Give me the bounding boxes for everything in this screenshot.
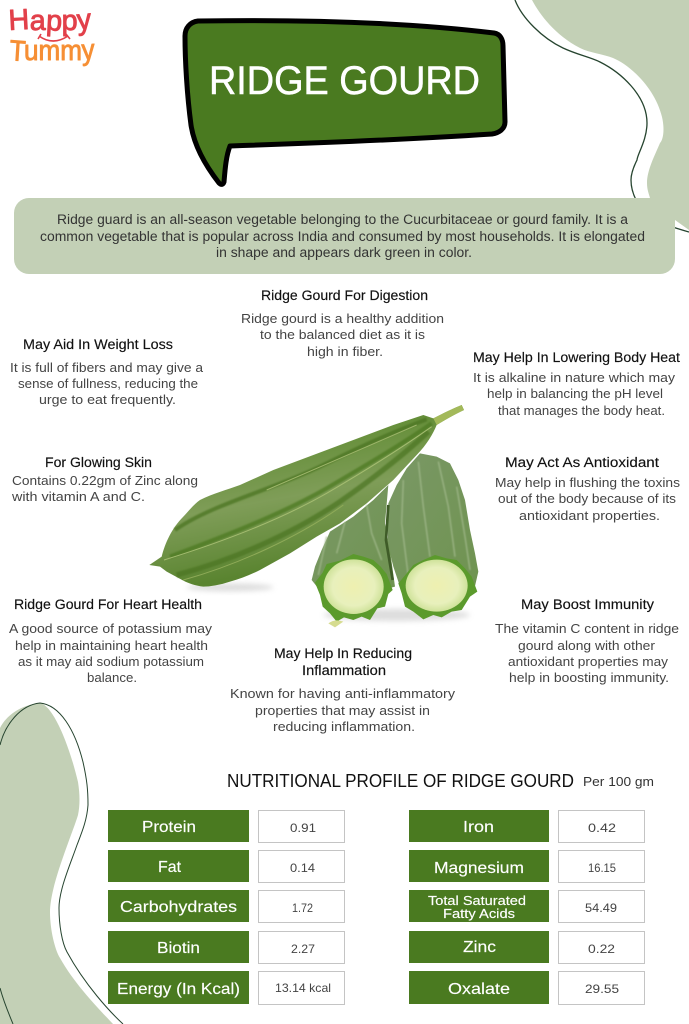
decorative blob: top right — [515, 0, 689, 232]
logo: Happy Tummy: Tummy — [9, 34, 96, 68]
benefit: heart health: balance. — [87, 670, 137, 685]
nutrition table: left column: 1.72 — [292, 901, 313, 915]
nutrition table: right column: Fatty Acids — [443, 906, 516, 921]
nutrition table: right column: 0.22 — [588, 942, 615, 956]
benefit: body heat: help in balancing the pH level — [487, 386, 663, 401]
benefit: digestion: Ridge gourd is a healthy addition — [241, 311, 444, 326]
nutrition table: left column: 0.14 — [290, 861, 315, 875]
cut piece: left — [312, 485, 395, 603]
benefit: inflammation: Inflammation — [302, 663, 386, 678]
benefit: glowing skin: For Glowing Skin — [45, 455, 152, 470]
cut piece: right — [387, 453, 478, 593]
nutrition table: right column: 29.55 — [585, 982, 619, 996]
cut face: right — [398, 555, 477, 619]
nutrition table: right column: 54.49 — [585, 901, 617, 915]
nutrition table: left column: Biotin — [157, 940, 200, 957]
nutrition table: left column: 0.91 — [290, 821, 316, 835]
nutrition heading: Per 100 gm — [583, 774, 654, 789]
nutrition table: left column: Carbohydrates — [120, 899, 237, 916]
benefit: weight loss: May Aid In Weight Loss — [23, 337, 173, 352]
benefit: inflammation: Known for having anti-inflammatory — [230, 686, 456, 701]
benefit: immunity: antioxidant properties may — [508, 654, 669, 669]
decorative blob: bottom left — [0, 703, 123, 1024]
nutrition table: right column: Oxalate — [448, 981, 510, 998]
nutrition table: right column: Total Saturated — [428, 893, 526, 908]
benefit: heart health: Ridge Gourd For Heart Health — [14, 597, 202, 612]
intro text: in shape and appears dark green in color. — [216, 245, 472, 260]
logo: Happy Tummy — [8, 4, 96, 68]
nutrition table: right column — [409, 810, 644, 1004]
title text: RIDGE GOURD — [209, 59, 480, 103]
benefit: antioxidant: antioxidant properties. — [519, 508, 660, 523]
benefit: digestion: high in fiber. — [307, 344, 383, 359]
nutrition table: left column — [108, 810, 344, 1004]
nutrition table: right column: 0.42 — [588, 821, 616, 835]
benefit: immunity: gourd along with other — [518, 638, 656, 653]
logo: Happy Tummy: Happy — [8, 4, 93, 38]
benefit: glowing skin: with vitamin A and C. — [11, 489, 145, 504]
nutrition table: right column: Iron — [463, 819, 494, 836]
title speech bubble — [185, 21, 505, 184]
nutrition table: right column: Magnesium — [434, 860, 524, 877]
benefit: inflammation: reducing inflammation. — [273, 719, 415, 734]
benefit: heart health: help in maintaining heart health — [15, 638, 208, 653]
nutrition table: left column: Protein — [142, 819, 196, 836]
intro panel — [14, 198, 675, 274]
benefit: heart health: A good source of potassium may — [9, 621, 213, 636]
benefit: body heat: May Help In Lowering Body Heat — [473, 350, 680, 365]
benefit: heart health: as it may aid sodium potassium — [18, 654, 204, 669]
benefit: weight loss: urge to eat frequently. — [39, 392, 176, 407]
intro text: common vegetable that is popular across India and consumed by most households. It is elongated — [40, 229, 645, 244]
nutrition table: left column: Energy (In Kcal) — [117, 981, 240, 998]
benefit: digestion: Ridge Gourd For Digestion — [261, 288, 428, 303]
nutrition heading: NUTRITIONAL PROFILE OF RIDGE GOURD — [227, 771, 574, 791]
nutrition table: left column: 13.14 kcal — [275, 981, 331, 995]
benefit: antioxidant: May help in flushing the toxins — [495, 475, 681, 490]
benefit: digestion: to the balanced diet as it is — [260, 327, 426, 342]
benefit: inflammation — [230, 646, 456, 734]
benefit: inflammation: properties that may assist in — [255, 703, 430, 718]
benefit: antioxidant: May Act As Antioxidant — [505, 455, 659, 470]
nutrition table: right column: 16.15 — [588, 861, 616, 875]
benefit: inflammation: May Help In Reducing — [274, 646, 412, 661]
intro text — [40, 212, 645, 260]
cut face: left — [315, 554, 393, 622]
benefit: immunity: The vitamin C content in ridge — [495, 621, 679, 636]
benefit: weight loss: It is full of fibers and may give a — [10, 360, 204, 375]
benefit: immunity: help in boosting immunity. — [509, 670, 669, 685]
benefit: body heat: It is alkaline in nature which may — [473, 370, 676, 385]
nutrition table: left column: Fat — [158, 859, 182, 876]
benefit: weight loss — [10, 337, 204, 407]
benefit: immunity: May Boost Immunity — [521, 597, 654, 612]
benefit: immunity — [495, 597, 679, 685]
benefit: body heat: that manages the body heat. — [498, 403, 665, 418]
nutrition table: left column: 2.27 — [291, 942, 315, 956]
intro text: Ridge guard is an all-season vegetable belonging to the Cucurbitaceae or gourd family. It is a — [57, 212, 628, 227]
benefit: weight loss: sense of fullness, reducing the — [18, 376, 198, 391]
benefit: glowing skin: Contains 0.22gm of Zinc along — [12, 473, 198, 488]
gourd body — [149, 405, 464, 587]
benefit: heart health — [9, 597, 213, 685]
benefit: antioxidant — [495, 455, 681, 523]
benefit: body heat — [473, 350, 680, 418]
benefit: glowing skin — [11, 455, 198, 504]
benefit: digestion — [241, 288, 444, 359]
illustration: ridge gourd vegetable — [149, 405, 478, 627]
nutrition table: right column: Zinc — [463, 939, 496, 956]
benefit: antioxidant: out of the body because of its — [498, 491, 677, 506]
